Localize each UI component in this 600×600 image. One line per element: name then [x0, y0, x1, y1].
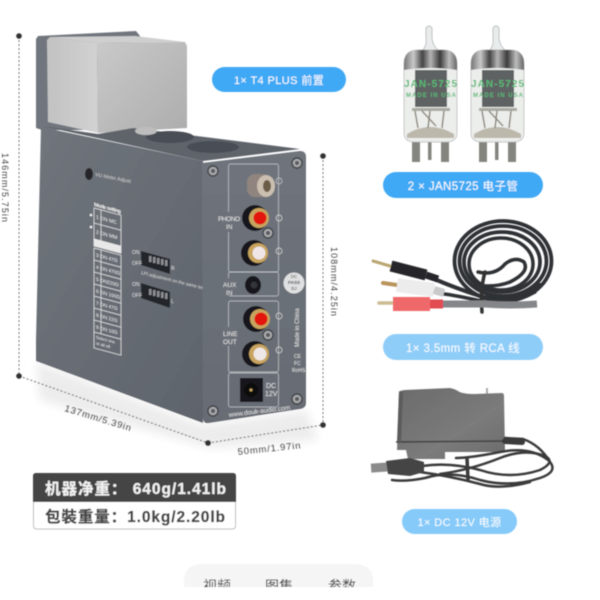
channel markers [276, 215, 282, 353]
tab labels: 视频 [203, 578, 231, 594]
dimension lines [16, 33, 326, 446]
net weight row: 机器净重： 640g/1.41lb [45, 479, 226, 498]
RCA cable [373, 221, 552, 312]
mode setting table: Mode setting [94, 202, 121, 215]
tube left: JAN-5725 [404, 79, 457, 90]
tab bar [184, 564, 373, 594]
mode setting table: 1 ON MC [96, 215, 117, 226]
weight table [33, 473, 236, 529]
voltage sticker [284, 272, 304, 294]
rear panel [202, 151, 306, 423]
panel labels: LINE [223, 331, 238, 338]
VU meter adjust hole and label [85, 168, 132, 185]
line out R jack [243, 306, 270, 332]
label pill: preamp: 1× T4 PLUS 前置 [234, 73, 324, 87]
tube left [404, 26, 457, 162]
mode setting table: 6 ON 100Ω [96, 289, 120, 301]
label pill: tubes [383, 172, 543, 198]
panel screws [208, 158, 302, 416]
mode setting table: 9 ON 10Ω [96, 325, 118, 336]
mode setting table: or all off [96, 341, 111, 350]
vacuum tubes [404, 26, 524, 162]
phono R jack [242, 205, 269, 231]
panel labels: RoHS [292, 368, 306, 374]
back plate [36, 31, 140, 130]
DIP switch L: ON [132, 282, 140, 288]
faded cable strip [443, 304, 537, 305]
DC power jack [240, 378, 263, 402]
tab labels: 参数 [328, 578, 356, 594]
DIP switch L: OFF [132, 293, 142, 299]
3.5mm plug [373, 261, 438, 279]
tube right: JAN-5725 [471, 79, 524, 90]
power adapter [371, 388, 552, 487]
DIP switch R: OFF [132, 261, 142, 267]
label pill: power supply: 1× DC 12V 电源 [418, 515, 501, 529]
tube right: MADE IN USA [473, 93, 524, 99]
VU meter adjust hole and label: VU Meter Adjust [95, 172, 132, 185]
white RCA plug [383, 283, 444, 293]
cable tie [481, 272, 485, 312]
label pill: tubes: 2 × JAN5725 电子管 [408, 179, 518, 193]
panel labels: DC [266, 383, 276, 390]
dimension: length 137mm: 137mm/5.39in [63, 403, 132, 434]
panel labels: www.douk-audio.com [227, 405, 291, 419]
DIP switch L [132, 282, 174, 308]
phono L jack [241, 240, 268, 266]
floor shadow [36, 362, 318, 448]
mode setting table: 8 ON 22Ω [96, 313, 118, 324]
label pill: cable [383, 334, 543, 360]
device: T4 PLUS preamp [36, 31, 318, 448]
panel labels: IN [226, 290, 233, 297]
input and output frames [228, 164, 278, 407]
tab labels [203, 578, 356, 594]
DIP switch R: R [171, 266, 175, 272]
line out L jack [242, 341, 269, 367]
label pill: power supply [402, 509, 517, 534]
red RCA plug [379, 303, 443, 304]
tab labels: 图集 [265, 578, 293, 594]
adapter prong [486, 388, 488, 394]
DIP switch R [132, 250, 175, 274]
adapter seam [396, 441, 505, 442]
net weight row [33, 473, 236, 502]
tube left: MADE IN USA [406, 93, 457, 99]
side panel [36, 127, 203, 423]
panel labels: AUX [223, 282, 237, 289]
mode setting table: 5 ON220Ω [96, 277, 119, 289]
silver tube cover [47, 36, 187, 133]
DC barrel plug [371, 458, 424, 476]
aux jack [245, 276, 261, 294]
panel labels: FC [294, 361, 301, 367]
panel labels: OUT [223, 339, 237, 346]
cable coil [432, 221, 552, 303]
panel labels: CE [294, 354, 302, 360]
tube right [471, 26, 524, 162]
panel labels: Made in China [295, 308, 301, 347]
DIP switch R: ON [132, 250, 140, 256]
panel labels: PHONO [218, 216, 240, 223]
label pill: preamp [212, 67, 346, 92]
voltage sticker: BJ [291, 286, 297, 291]
voltage sticker: PASS [288, 280, 300, 285]
dimension: height 146mm: 146mm/5.75in [0, 153, 10, 222]
mode setting table [94, 202, 121, 355]
DIP switch L: L [171, 299, 174, 305]
mode setting table: Select one [96, 335, 116, 345]
adapter body [397, 388, 505, 459]
mode setting table: 4 ON 470Ω [96, 265, 120, 277]
panel labels: IN [226, 224, 233, 231]
LPI adjustment label: LPI adjustment on the same time [141, 270, 208, 291]
mode setting table: 3 ON 47Ω [96, 253, 118, 264]
panel labels: 12V [265, 391, 278, 398]
label pill: cable: 1× 3.5mm 转 RCA 线 [406, 341, 520, 355]
power cord [392, 438, 552, 487]
top face [42, 126, 300, 161]
panel labels [218, 216, 306, 419]
label backings [217, 212, 241, 346]
dimension: width 50mm: 50mm/1.97in [237, 440, 301, 458]
mode setting table: 2 ON MM [96, 230, 117, 241]
adapter side shade [397, 392, 403, 442]
mode setting table: 7 ON 47Ω [96, 301, 118, 312]
mode dots [90, 214, 92, 228]
dimension: depth 108mm: 108mm/4.25in [329, 247, 339, 316]
package weight row [34, 474, 236, 529]
ground binding post [247, 174, 282, 197]
voltage sticker: DC [291, 274, 298, 279]
package weight row: 包裝重量：1.0kg/2.20lb [45, 507, 225, 526]
